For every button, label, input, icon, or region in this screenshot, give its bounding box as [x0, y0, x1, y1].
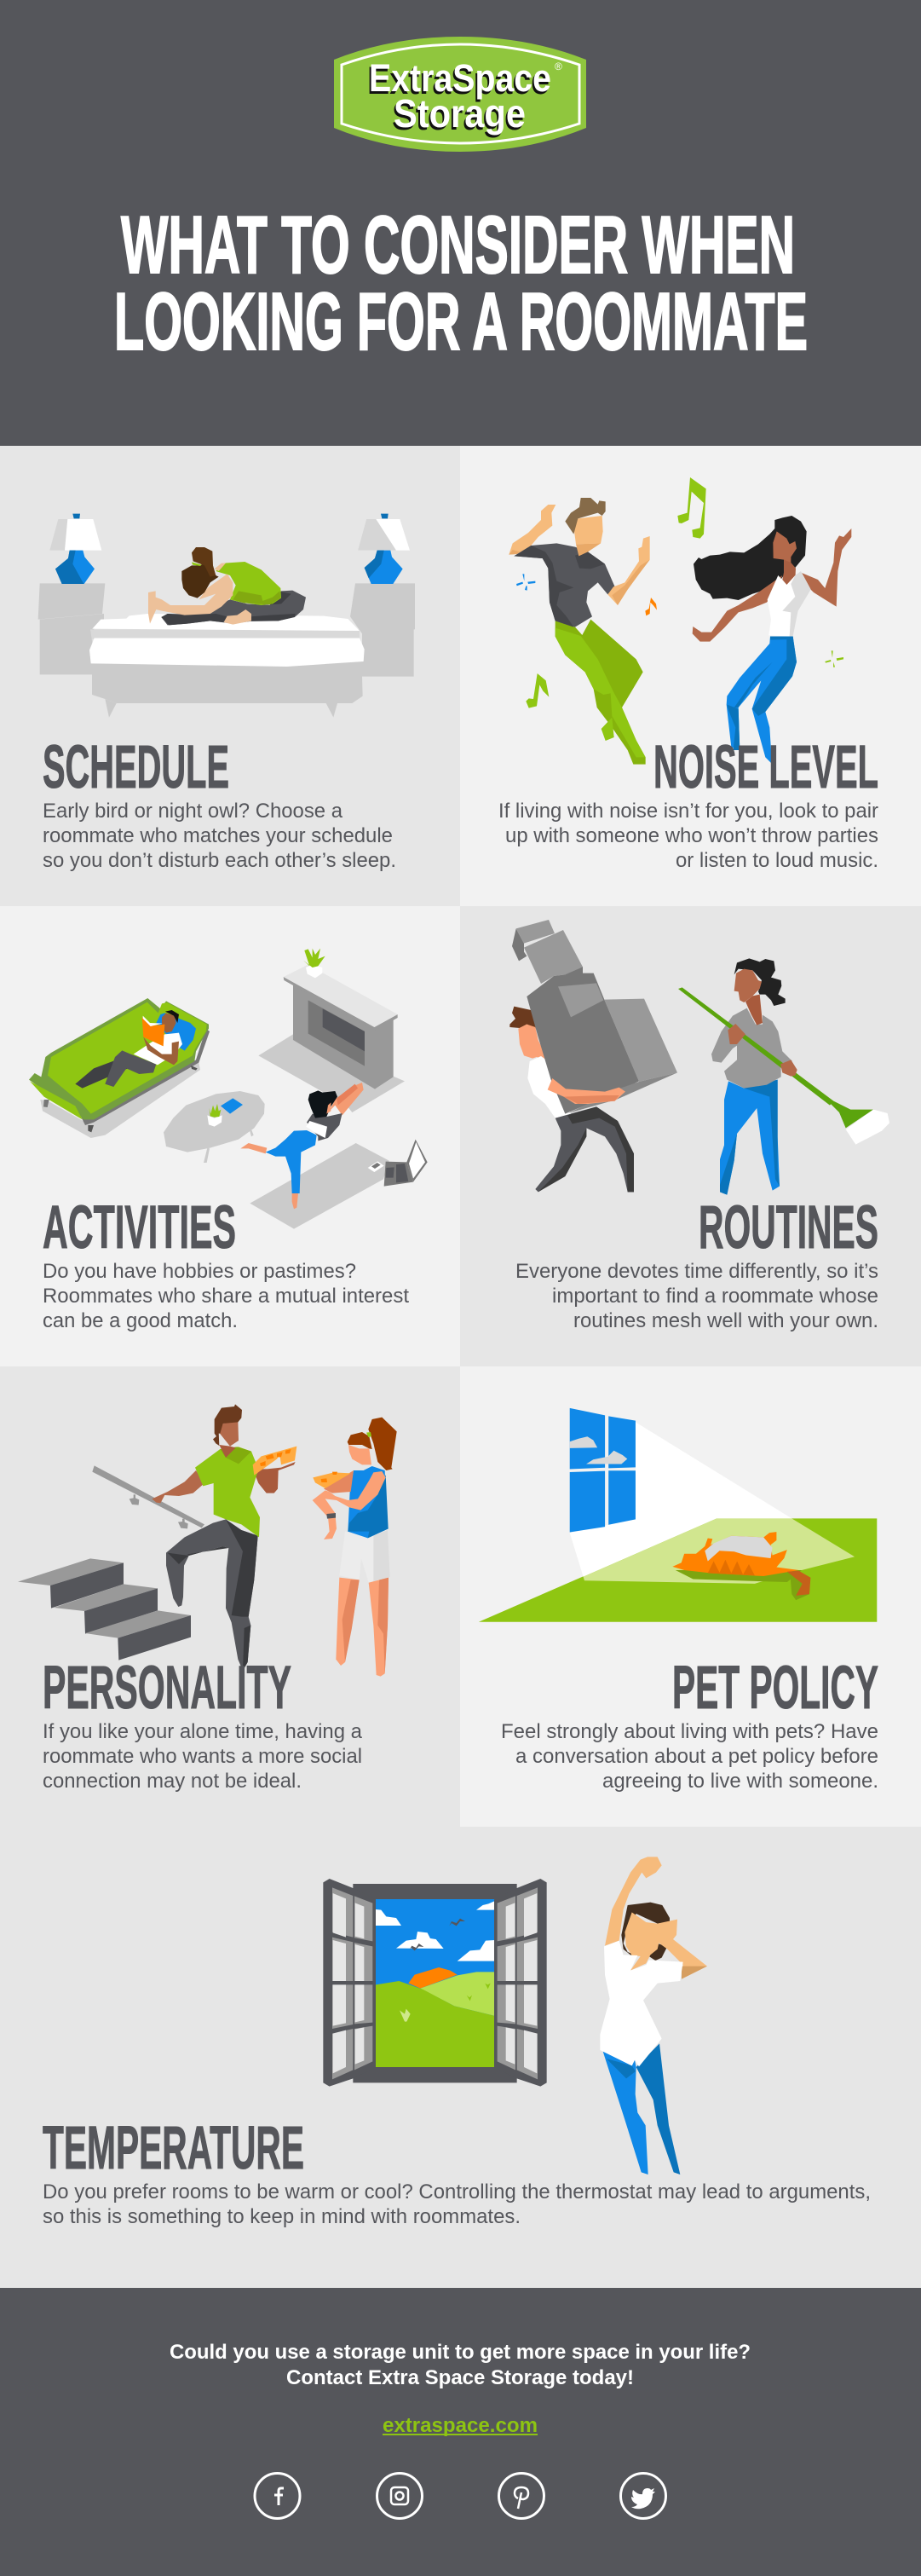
- logo: Extra Space Storage: Storage: [394, 91, 526, 136]
- body text: [501, 1720, 878, 1793]
- logo: Extra Space Storage: ®: [555, 61, 562, 72]
- body text: [43, 800, 396, 872]
- body text: so this is something to keep in mind with roommates.: [43, 2205, 521, 2228]
- body text: [43, 2180, 871, 2228]
- illustration: person carrying boxes and person sweeping: [509, 920, 889, 1195]
- body text: up with someone who won’t throw parties: [505, 824, 878, 847]
- body text: connection may not be ideal.: [43, 1770, 302, 1793]
- illustration: cat sunbathing on floor under window: [479, 1408, 877, 1622]
- panel: routines: [460, 906, 921, 1366]
- call to action text: Could you use a storage unit to get more space in your life?: [170, 2341, 751, 2364]
- body text: [515, 1260, 878, 1332]
- heading: PERSONALITY: [43, 1655, 291, 1722]
- body text: important to find a roommate whose: [552, 1285, 878, 1308]
- body text: Roommates who share a mutual interest: [43, 1285, 409, 1308]
- logo: Extra Space Storage: Storage: [392, 94, 524, 138]
- icon: twitter: [620, 2474, 666, 2518]
- body text: If living with noise isn’t for you, look to pair: [498, 800, 878, 823]
- body text: Feel strongly about living with pets? Have: [501, 1720, 878, 1743]
- body text: If you like your alone time, having a: [43, 1720, 363, 1743]
- body text: Do you have hobbies or pastimes?: [43, 1260, 356, 1283]
- panel: personality: [0, 1366, 460, 1827]
- icon: pinterest: [499, 2474, 544, 2518]
- call to action text: [170, 2341, 751, 2389]
- body text: agreeing to live with someone.: [602, 1770, 878, 1793]
- icon: facebook: [255, 2474, 300, 2518]
- call to action text: Contact Extra Space Storage today!: [286, 2366, 634, 2389]
- footer panel: [0, 2288, 921, 2576]
- illustration: living room with reading and yoga: [29, 949, 428, 1229]
- panel: activities: [0, 906, 460, 1366]
- panel: schedule: [0, 446, 460, 906]
- illustration: woman stretching on bed between lamps: [38, 514, 415, 718]
- body text: [43, 1720, 363, 1793]
- body text: [498, 800, 878, 872]
- logo: Extra Space Storage: ExtraSpace: [369, 56, 551, 100]
- panel: temperature: [0, 1827, 921, 2288]
- body text: so you don’t disturb each other’s sleep.: [43, 849, 396, 872]
- body text: Do you prefer rooms to be warm or cool? Controlling the thermostat may lead to arguments,: [43, 2180, 871, 2203]
- heading: TEMPERATURE: [43, 2115, 304, 2182]
- illustration: two people with pizza on stairs: [18, 1404, 397, 1677]
- logo: Extra Space Storage: [334, 37, 586, 152]
- panel: noise level: [460, 446, 921, 906]
- body text: Everyone devotes time differently, so it’s: [515, 1260, 878, 1283]
- illustration: open window and woman stretching: [323, 1857, 707, 2175]
- header panel: [0, 0, 921, 446]
- body text: routines mesh well with your own.: [573, 1309, 878, 1332]
- body text: roommate who wants a more social: [43, 1745, 362, 1768]
- body text: can be a good match.: [43, 1309, 238, 1332]
- body text: roommate who matches your schedule: [43, 824, 393, 847]
- body text: or listen to loud music.: [676, 849, 878, 872]
- body text: Early bird or night owl? Choose a: [43, 800, 343, 823]
- icon: instagram: [377, 2474, 423, 2518]
- heading: ACTIVITIES: [43, 1194, 236, 1262]
- title: [114, 199, 808, 367]
- illustration: two people dancing with music notes: [509, 477, 851, 765]
- heading: SCHEDULE: [43, 734, 229, 801]
- body text: a conversation about a pet policy before: [515, 1745, 878, 1768]
- logo: Extra Space Storage: ExtraSpace: [367, 59, 550, 102]
- website link: extraspace.com: [383, 2414, 538, 2437]
- body text: [43, 1260, 409, 1332]
- panel: pet policy: [460, 1366, 921, 1827]
